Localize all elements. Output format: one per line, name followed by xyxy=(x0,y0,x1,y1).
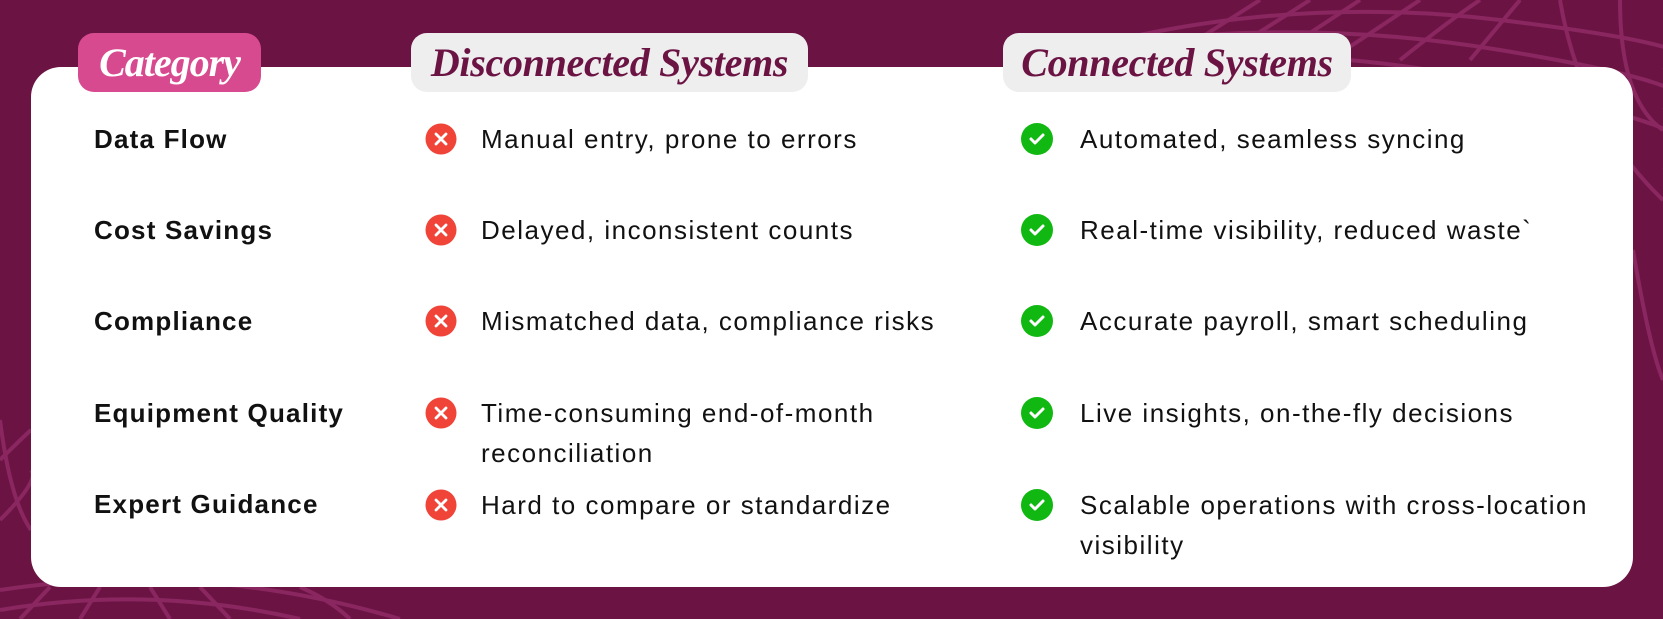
column: disconnected text: Delayed, inconsistent counts xyxy=(481,215,854,245)
column: connected text: Live insights, on-the-fly decisions xyxy=(1080,398,1514,428)
column: disconnected text: Manual entry, prone to errors xyxy=(481,124,858,154)
heading: Category xyxy=(78,33,261,92)
heading: Disconnected Systems xyxy=(411,33,808,92)
column: disconnected text: Hard to compare or standardize xyxy=(481,490,892,520)
row labels: Expert Guidance xyxy=(94,489,319,519)
heading: Disconnected Systems: Disconnected Systems xyxy=(431,40,788,85)
column: connected text: Real-time visibility, reduced waste` xyxy=(1080,215,1532,245)
column: disconnected text: Mismatched data, compliance risks xyxy=(481,306,935,336)
heading: Category: Category xyxy=(99,40,240,85)
row labels: Data Flow xyxy=(94,124,228,154)
column: connected text: visibility xyxy=(1080,530,1185,560)
column: connected text: Accurate payroll, smart scheduling xyxy=(1080,306,1528,336)
heading: Connected Systems: Connected Systems xyxy=(1021,40,1333,85)
column: connected text: Scalable operations with cross-location xyxy=(1080,490,1588,520)
heading: Connected Systems xyxy=(1003,33,1351,92)
column: disconnected text: reconciliation xyxy=(481,438,654,468)
row labels: Equipment Quality xyxy=(94,398,344,428)
row labels: Compliance xyxy=(94,306,253,336)
column: disconnected text: Time-consuming end-of-month xyxy=(481,398,875,428)
column: connected text: Automated, seamless syncing xyxy=(1080,124,1466,154)
row labels: Cost Savings xyxy=(94,215,273,245)
